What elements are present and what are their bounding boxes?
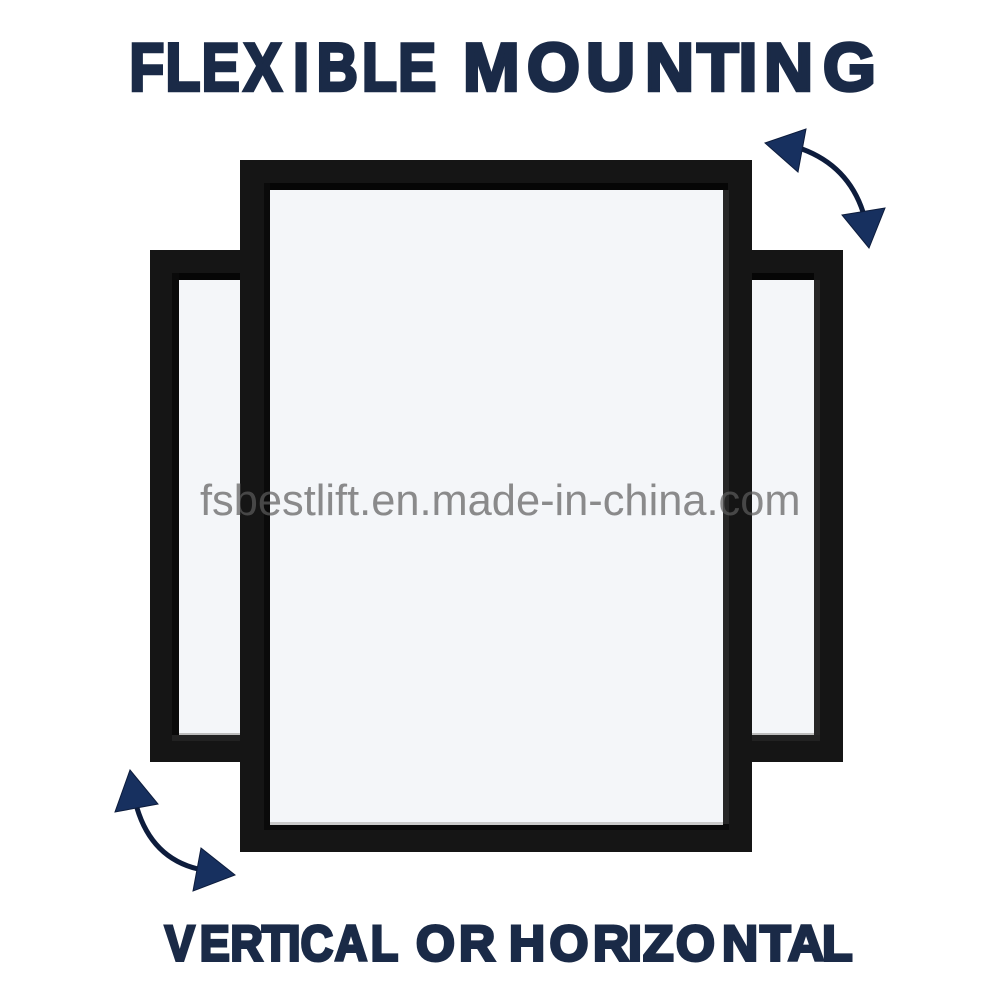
arrow: bottom-left double-headed rotation — [115, 770, 235, 891]
title — [129, 29, 876, 105]
subtitle: HORIZONTAL — [509, 916, 853, 972]
subtitle: OR — [416, 916, 495, 972]
arrow: top-right double-headed rotation — [765, 129, 885, 248]
watermark: fsbestlift.en.made-in-china.com — [200, 477, 800, 525]
subtitle — [165, 916, 853, 972]
main front frame — [240, 160, 752, 852]
left frame, behind — [150, 250, 241, 762]
right frame, behind — [752, 250, 843, 762]
title: MOUNTING — [463, 29, 876, 105]
title: FLEXIBLE — [129, 30, 436, 105]
subtitle: VERTICAL — [165, 916, 398, 972]
